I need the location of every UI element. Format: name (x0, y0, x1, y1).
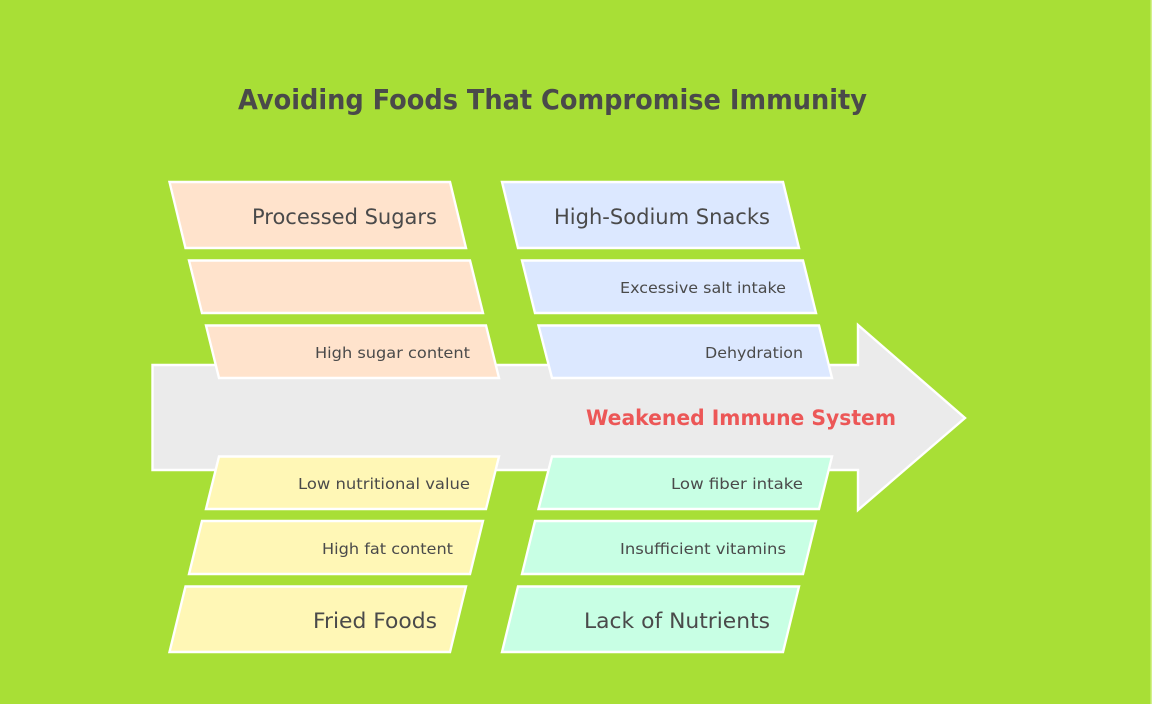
cause: High fat content (189, 521, 483, 574)
cause: Low nutritional value (206, 456, 499, 509)
cause: Low fiber intake (538, 456, 832, 509)
cause: Excessive salt intake: Excessive salt intake (620, 279, 786, 297)
category: Processed Sugars (170, 182, 466, 248)
arrow: spine (152, 325, 965, 510)
cause: empty box (189, 260, 483, 313)
cause: High sugar content (206, 326, 499, 378)
category: High-Sodium Snacks (502, 182, 799, 248)
cause: High fat content: High fat content (322, 540, 453, 558)
category: Lack of Nutrients (502, 586, 799, 652)
cause: High sugar content: High sugar content (315, 344, 470, 362)
cause: Excessive salt intake (522, 260, 816, 313)
category: High-Sodium Snacks: High-Sodium Snacks (554, 205, 770, 229)
cause: Dehydration: Dehydration (705, 344, 803, 362)
category: Fried Foods (170, 586, 466, 652)
cause: Insufficient vitamins: Insufficient vitamins (620, 540, 786, 558)
cause: Low fiber intake: Low fiber intake (671, 475, 803, 493)
cause: Insufficient vitamins (522, 521, 816, 574)
category: Fried Foods: Fried Foods (313, 609, 437, 633)
title: Avoiding Foods That Compromise Immunity (238, 83, 867, 116)
effect label: Weakened Immune System (586, 406, 896, 430)
cause: Low nutritional value: Low nutritional value (298, 475, 470, 493)
category: Processed Sugars: Processed Sugars (252, 205, 437, 229)
category: Lack of Nutrients: Lack of Nutrients (584, 609, 770, 633)
cause: Dehydration (538, 326, 832, 378)
